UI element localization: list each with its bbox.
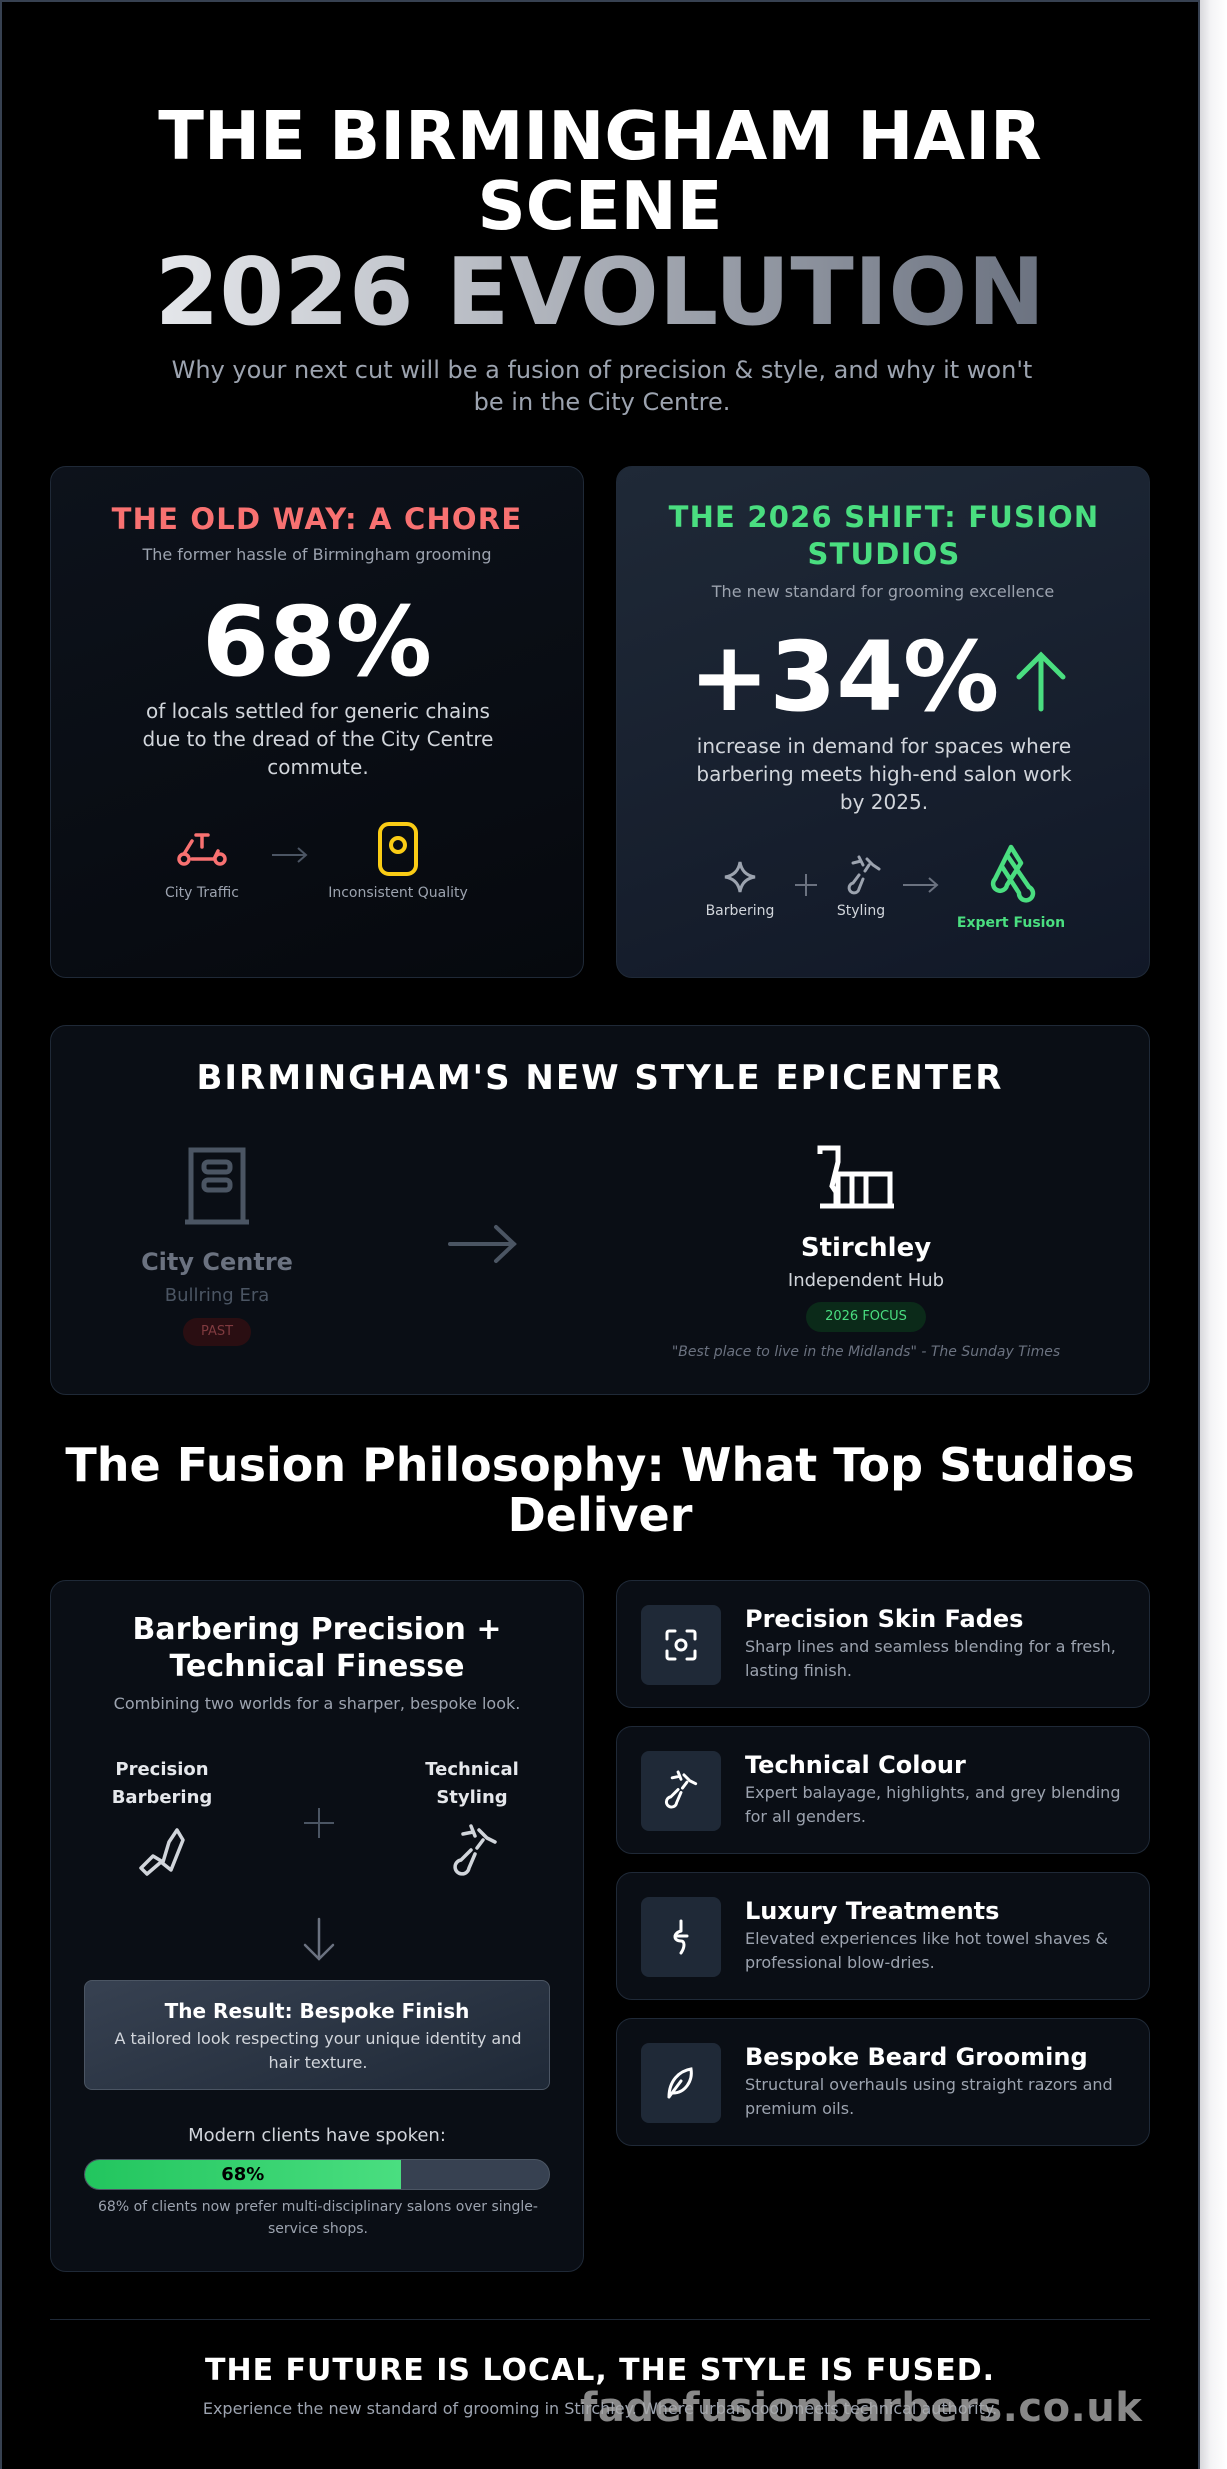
result box: The Result: Bespoke Finish xyxy=(165,1999,469,2023)
heading xyxy=(133,1612,501,1684)
icon: styling xyxy=(848,855,880,894)
future: stirchley: Independent Hub xyxy=(788,1270,944,1291)
icon: quality xyxy=(378,822,418,876)
title & text xyxy=(745,1897,1108,1972)
footer heading: THE FUTURE IS LOCAL, THE STYLE IS FUSED. xyxy=(205,2353,995,2388)
column: precision barbering: Precision xyxy=(115,1759,209,1780)
service card: luxury treatments xyxy=(616,1872,1150,2000)
watermark: fadefusionbarbers.co.uk xyxy=(580,2385,1142,2431)
pill: past: PAST xyxy=(201,1324,233,1339)
arrow xyxy=(448,1224,517,1264)
footer text: Experience the new standard of grooming in Stirchley. Where urban cool meets technical authority. xyxy=(203,2399,997,2418)
label: inconsistent quality: Inconsistent Quality xyxy=(328,885,468,901)
caption: 68% of clients now prefer multi-disciplinary salons over single-service shops. xyxy=(98,2199,538,2237)
heading: fusion philosophy xyxy=(65,1438,1135,1542)
icon: razor xyxy=(139,1828,185,1876)
past: city centre: Bullring Era xyxy=(165,1285,269,1306)
icon: brush xyxy=(453,1824,497,1876)
result box: A tailored look respecting your unique identity and hair texture. xyxy=(114,2029,522,2072)
title: THE BIRMINGHAM HAIR xyxy=(158,97,1042,175)
icon: sparkle xyxy=(724,862,756,892)
subtitle: Why your next cut will be a fusion of precision & style, and why it won't be in the City Centre. xyxy=(172,356,1032,416)
icon row: traffic to quality xyxy=(165,822,468,901)
heading: BIRMINGHAM'S NEW STYLE EPICENTER xyxy=(196,1058,1004,1098)
label: expert fusion: Expert Fusion xyxy=(957,915,1065,931)
title & text: Bespoke Beard Grooming xyxy=(745,2043,1088,2071)
service card: technical colour xyxy=(616,1726,1150,1854)
progress bar: 68% xyxy=(221,2164,264,2185)
service card: beard grooming xyxy=(616,2018,1150,2146)
column: technical styling xyxy=(425,1759,519,1876)
title & text: Luxury Treatments xyxy=(745,1897,999,1925)
quote: "Best place to live in the Midlands" - The Sunday Times xyxy=(672,1344,1060,1360)
result box xyxy=(84,1980,550,2090)
column: technical styling: Styling xyxy=(436,1787,508,1808)
panel: old way xyxy=(50,466,584,978)
icon: brush xyxy=(641,1751,721,1831)
label: stirchley: Stirchley xyxy=(801,1233,931,1263)
description: of locals settled for generic chains due to the dread of the City Centre commute. xyxy=(142,699,494,779)
label: styling: Styling xyxy=(837,903,885,919)
heading: Barbering Precision + xyxy=(133,1612,501,1647)
icon: leaf xyxy=(641,2043,721,2123)
title: SCENE xyxy=(477,167,723,245)
title highlight: 2026 evolution: 2026 EVOLUTION xyxy=(155,238,1045,346)
icon: landmark xyxy=(818,1146,894,1208)
arrow xyxy=(272,847,308,863)
stat +34%: +34% xyxy=(689,621,999,733)
column: precision barbering xyxy=(112,1759,212,1876)
progress bar xyxy=(84,2159,550,2190)
future: stirchley xyxy=(672,1146,1060,1360)
panel: style epicenter xyxy=(50,1025,1150,1395)
title & text: Technical Colour xyxy=(745,1751,966,1779)
panel: 2026 shift xyxy=(616,466,1150,978)
pill: 2026 focus xyxy=(806,1302,926,1332)
pill: 2026 focus: 2026 FOCUS xyxy=(825,1309,907,1324)
subheading: Combining two worlds for a sharper, bespoke look. xyxy=(114,1694,520,1713)
arrow down xyxy=(304,1918,334,1961)
pill: past xyxy=(183,1318,251,1346)
column: precision barbering: Barbering xyxy=(112,1787,212,1808)
past: city centre xyxy=(141,1148,293,1346)
heading: Technical Finesse xyxy=(170,1649,464,1684)
title & text: Elevated experiences like hot towel shaves & professional blow-dries. xyxy=(745,1929,1108,1972)
icon: scooter xyxy=(177,833,227,866)
label: city centre: City Centre xyxy=(141,1248,293,1276)
label: barbering: Barbering xyxy=(706,903,774,919)
title & text xyxy=(745,1605,1116,1680)
column: technical styling: Technical xyxy=(425,1759,519,1780)
heading: fusion philosophy: Deliver xyxy=(508,1488,692,1542)
label: city traffic: City Traffic xyxy=(165,885,239,901)
title & text: Expert balayage, highlights, and grey blending for all genders. xyxy=(745,1783,1120,1826)
subheading: The new standard for grooming excellence xyxy=(712,582,1054,601)
heading: fusion philosophy: The Fusion Philosophy: What Top Studios xyxy=(65,1438,1135,1492)
service card: skin fades xyxy=(616,1580,1150,1708)
icon: drop xyxy=(641,1897,721,1977)
title & text: Structural overhauls using straight razors and premium oils. xyxy=(745,2075,1113,2118)
title xyxy=(158,97,1042,245)
icon: expert fusion xyxy=(990,844,1036,903)
title & text xyxy=(745,1751,1120,1826)
plus xyxy=(304,1808,334,1838)
title & text xyxy=(745,2043,1113,2118)
icon: up arrow xyxy=(1016,652,1066,712)
heading: THE 2026 SHIFT: FUSION STUDIOS xyxy=(669,500,1099,571)
icon: focus xyxy=(641,1605,721,1685)
icon: building xyxy=(185,1148,249,1224)
heading: THE OLD WAY: A CHORE xyxy=(112,502,522,536)
title & text: Sharp lines and seamless blending for a fresh, lasting finish. xyxy=(745,1637,1116,1680)
subheading: The former hassle of Birmingham grooming xyxy=(142,545,492,564)
label: modern clients: Modern clients have spoken: xyxy=(188,2125,446,2146)
panel: precision + finesse xyxy=(50,1580,584,2272)
stat 68%: 68% xyxy=(202,586,432,698)
title & text: Precision Skin Fades xyxy=(745,1605,1023,1633)
icon row: fusion xyxy=(706,844,1065,931)
description: increase in demand for spaces where barbering meets high-end salon work by 2025. xyxy=(696,734,1072,814)
